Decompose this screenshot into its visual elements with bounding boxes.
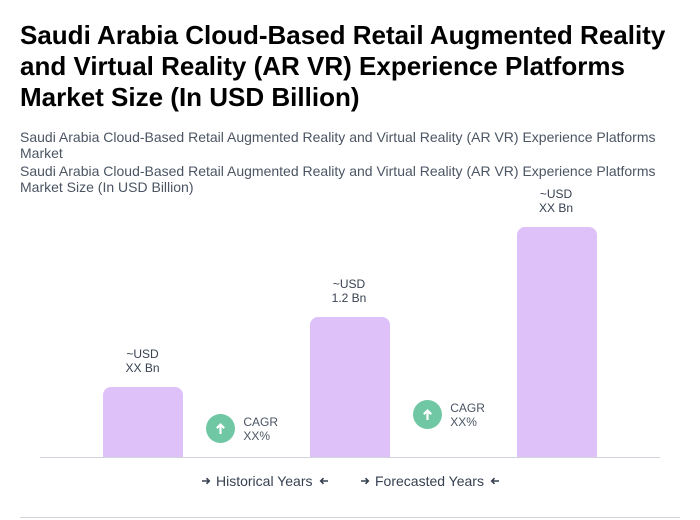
legend: forecasted years: Forecasted Years	[375, 473, 484, 489]
legend: historical years: Historical Years	[216, 473, 312, 489]
CAGR label 2	[450, 401, 485, 429]
value label: bar 3: XX Bn	[539, 201, 573, 215]
value label: bar 3: ~USD	[540, 187, 572, 201]
title: Saudi Arabia Cloud-Based Retail Augmented Reality and Virtual Reality (AR VR) Experience Platforms Market Size (In USD Billion)	[20, 20, 665, 112]
CAGR label 2: CAGR	[450, 401, 485, 415]
CAGR label 1: CAGR	[243, 415, 278, 429]
bar 3	[517, 227, 597, 457]
icon: CAGR up arrow 2	[413, 400, 442, 429]
value label: bar 1: XX Bn	[125, 361, 160, 375]
subtitle: Saudi Arabia Cloud-Based Retail Augmented Reality and Virtual Reality (AR VR) Experience Platforms Market	[20, 129, 656, 161]
chart subtitle: Saudi Arabia Cloud-Based Retail Augmented Reality and Virtual Reality (AR VR) Experience Platforms Market Size (In USD Billion)	[20, 163, 656, 195]
value label: bar 2	[332, 277, 366, 305]
CAGR label 1	[243, 415, 278, 443]
CAGR label 2: XX%	[450, 415, 477, 429]
value label: bar 3	[539, 187, 573, 215]
CAGR label 1: XX%	[243, 429, 270, 443]
value label: bar 2: 1.2 Bn	[332, 291, 366, 305]
value label: bar 2: ~USD	[333, 277, 365, 291]
bar 2	[310, 317, 390, 457]
value label: bar 1: ~USD	[126, 347, 159, 361]
value label: bar 1	[125, 347, 160, 375]
bar 1	[103, 387, 183, 457]
icon: CAGR up arrow 1	[206, 414, 235, 443]
